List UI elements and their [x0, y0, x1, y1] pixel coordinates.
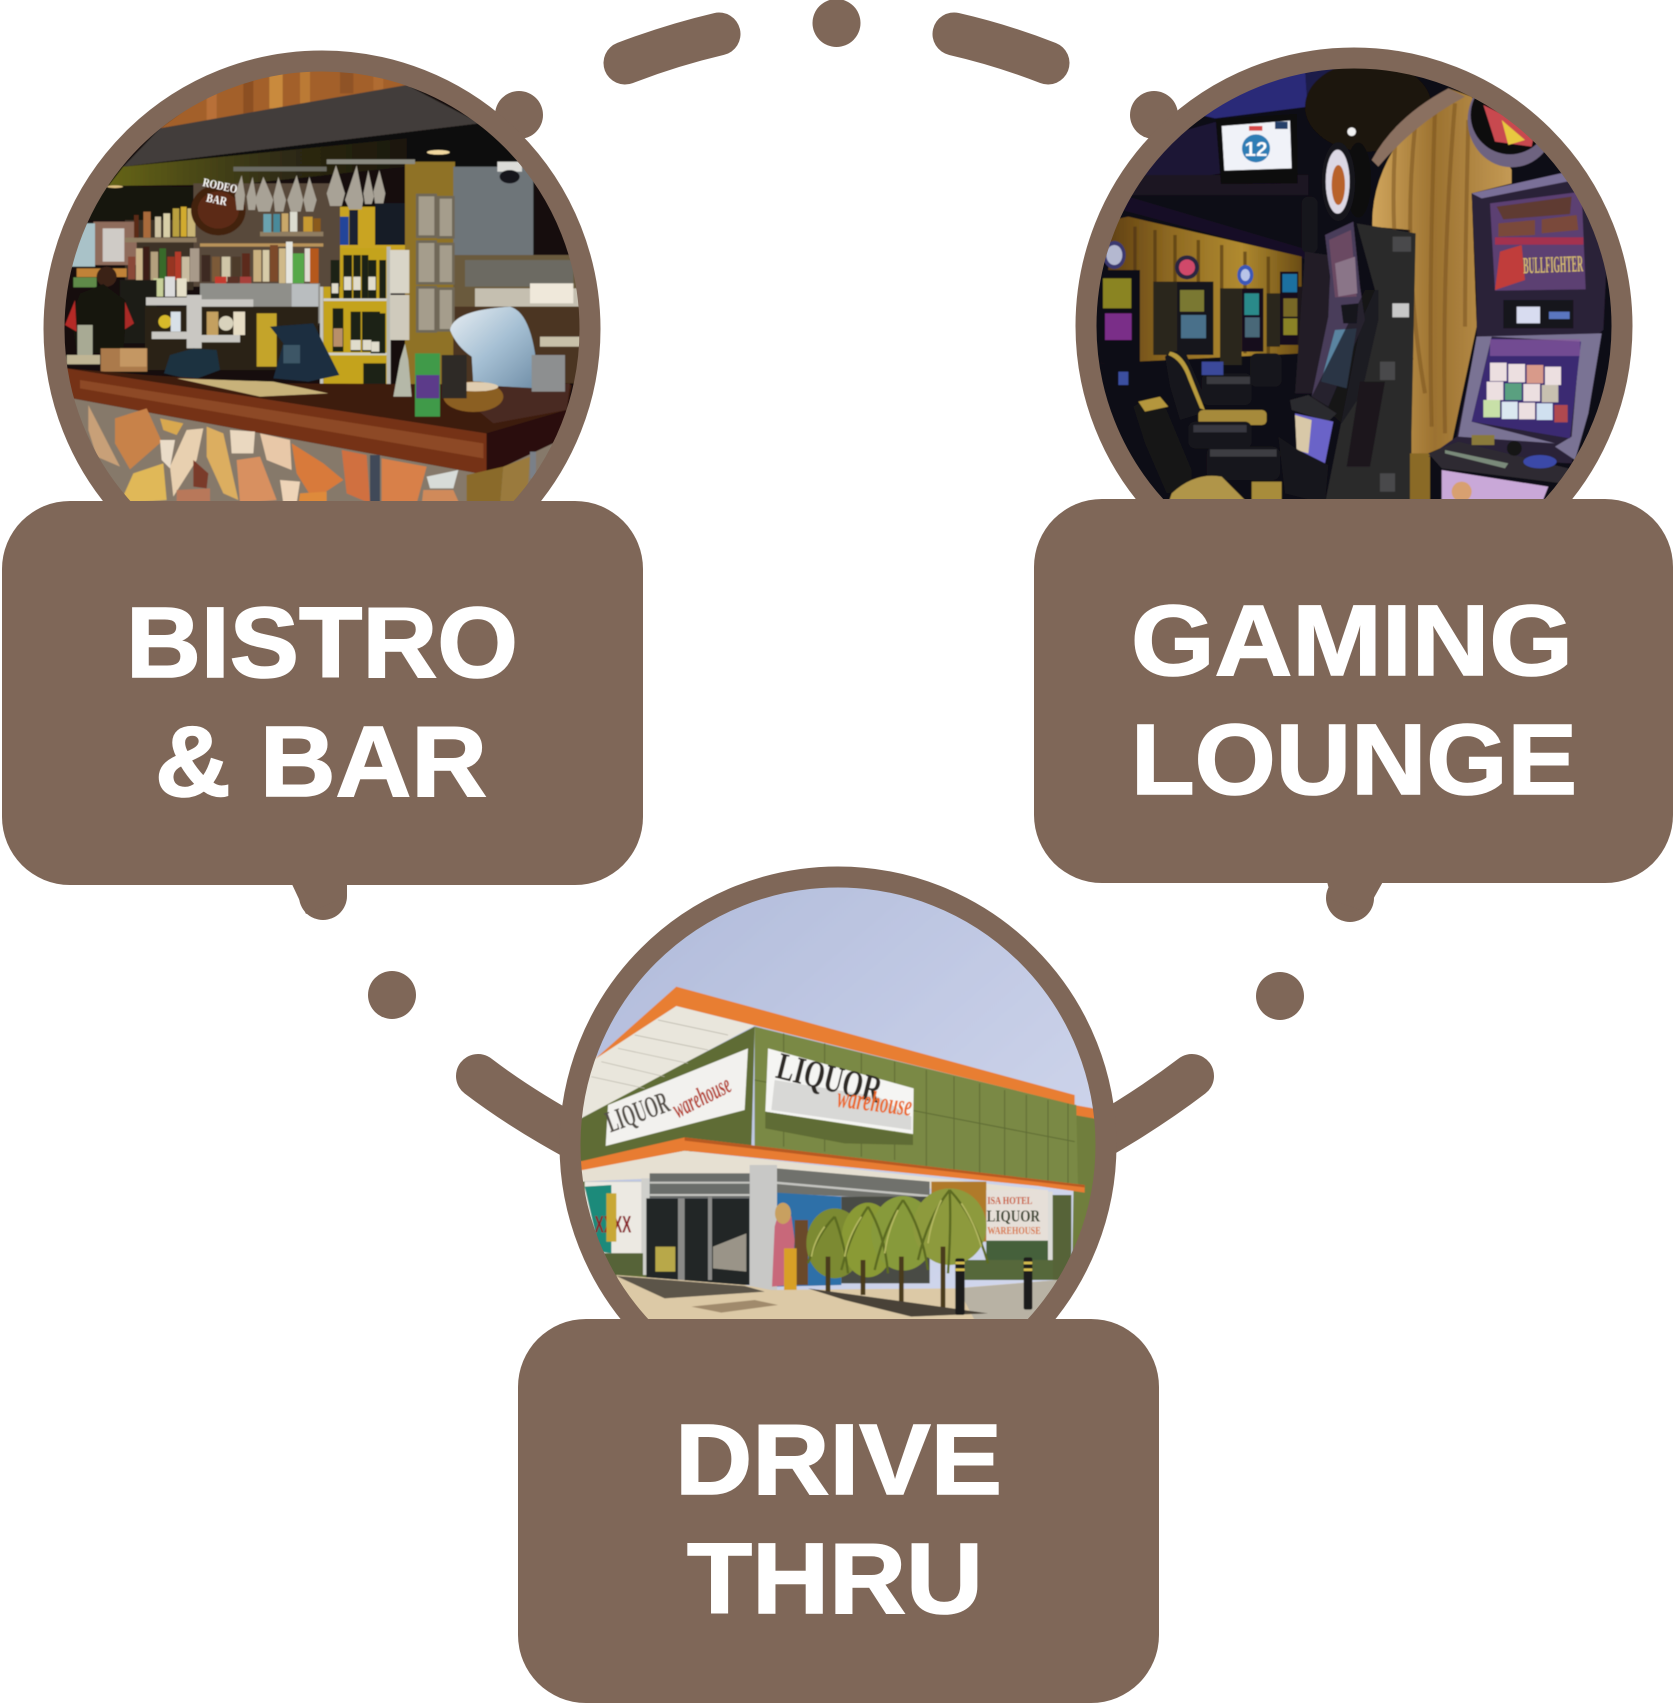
mid shelf bottles: [128, 242, 319, 283]
wall TV: [1216, 114, 1298, 184]
round toppers: [1302, 98, 1544, 252]
label box: gaming lounge: LOUNGE: [1131, 704, 1577, 816]
decorative dashed ring: lower right dot: [1256, 972, 1304, 1020]
barrel sign: BAR: [205, 191, 229, 209]
panel: drive thru: [518, 860, 1159, 1703]
sign left: LIQUOR: [601, 1085, 674, 1139]
label box: drive thru: [518, 1319, 1159, 1703]
panel: gaming lounge: [1034, 40, 1673, 922]
wall TV: 12: [1245, 138, 1267, 161]
bartender: [65, 267, 134, 353]
sign right: warehouse: [835, 1082, 914, 1123]
circle frame: gaming: [1086, 58, 1622, 594]
decorative dashed ring: top right dash: [954, 34, 1048, 63]
bottle can and basket: [393, 343, 503, 417]
connector nub: bistro circle: [495, 91, 543, 139]
decorative dashed ring: top left dash: [625, 34, 719, 63]
hotel sign: WAREHOUSE: [987, 1226, 1041, 1237]
hotel sign: [986, 1190, 1053, 1260]
chairs: [1118, 351, 1282, 503]
photo: liquor warehouse store: XXXX: [595, 1212, 631, 1239]
wine glass rack: [233, 159, 415, 212]
decorative dashed ring: top dot: [812, 0, 860, 47]
connector arm: right of drive thru: [1098, 1076, 1192, 1138]
label box: bistro and bar: & BAR: [155, 706, 487, 818]
palm bushes: [806, 1188, 988, 1317]
background machines: [1102, 241, 1315, 365]
green wall: [755, 1027, 1078, 1185]
countertop and front: [67, 368, 572, 475]
label box: gaming lounge: [1034, 499, 1673, 922]
top shelf bottles: [134, 203, 405, 245]
barrel sign: [191, 175, 246, 235]
label box: bistro and bar: [2, 501, 643, 920]
sign right: LIQUOR: [772, 1045, 887, 1112]
connector nub: gaming circle: [1130, 91, 1178, 139]
ground: [616, 1274, 1055, 1319]
middle machine: [1278, 222, 1416, 503]
circle frame: bistro: [54, 61, 590, 597]
bollards: [955, 1257, 1032, 1315]
label box: drive thru: THRU: [687, 1523, 983, 1635]
storefront: [583, 1181, 648, 1278]
sign left: [601, 1048, 748, 1146]
panel: bistro and bar: [2, 40, 643, 920]
wine bottles: [331, 255, 386, 392]
photo: gaming machines: [1096, 68, 1612, 499]
decorative dashed ring: lower left dot: [368, 971, 416, 1019]
label box: drive thru: DRIVE: [675, 1404, 1002, 1516]
security camera: [497, 162, 522, 183]
label box: bistro and bar: BISTRO: [126, 587, 518, 699]
connector arm: left of drive thru: [478, 1076, 575, 1138]
photo: liquor warehouse store: [580, 888, 1096, 1319]
circle frame: drive thru: [570, 877, 1106, 1413]
barrel sign: RODEO: [202, 175, 239, 196]
stone wall: [67, 397, 560, 507]
hotel sign: ISA HOTEL: [987, 1196, 1032, 1207]
curtain: [1372, 88, 1512, 500]
main slot machine: [1428, 172, 1608, 503]
beer taps: [146, 295, 253, 348]
photo: bar interior: [64, 72, 580, 501]
awning: [582, 1150, 1040, 1190]
roof fascia and soffit: [575, 1006, 755, 1120]
espresso machine: [450, 307, 538, 388]
hotel sign: LIQUOR: [987, 1207, 1041, 1226]
point of sale: [164, 323, 339, 382]
sign left: warehouse: [667, 1069, 736, 1124]
label box: gaming lounge: GAMING: [1131, 585, 1573, 697]
